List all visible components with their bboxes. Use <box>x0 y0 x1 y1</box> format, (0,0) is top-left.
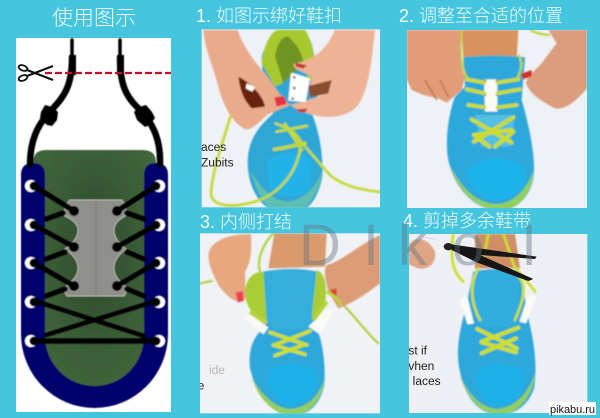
watermark text: k <box>398 213 428 278</box>
shoe insole <box>33 150 156 396</box>
panel: step 3 photo: e <box>198 378 205 392</box>
panel: lacing diagram <box>16 38 171 412</box>
right hand <box>526 30 587 109</box>
right hand <box>325 235 380 308</box>
photo caption fragment: st if <box>408 343 428 357</box>
title: 使用图示 <box>52 7 136 30</box>
hand <box>409 239 435 269</box>
heading: step 4: 4. 剪掉多余鞋带 <box>403 211 531 231</box>
laces <box>200 233 378 356</box>
watermark text <box>299 213 537 278</box>
photo caption fragment: ide <box>209 363 225 377</box>
lace ends and knots <box>30 55 160 346</box>
left hand <box>407 30 465 103</box>
watermark text: I <box>521 213 537 278</box>
panel: step 4 photo: laces <box>413 374 441 388</box>
panel: step 1 photo <box>201 29 380 210</box>
panel: step 4 photo: vhen <box>408 359 434 373</box>
panel: step 2 photo <box>407 30 587 211</box>
heading: step 1: 1. 如图示绑好鞋扣 <box>196 6 342 26</box>
shoe <box>250 269 325 416</box>
photo caption fragment: aces <box>201 140 226 154</box>
clip left and right <box>243 313 268 334</box>
left hand <box>208 234 251 301</box>
clip <box>484 79 497 112</box>
nails <box>274 96 287 107</box>
collar <box>262 30 314 87</box>
shoe <box>447 56 534 211</box>
panel: step 4 photo <box>408 234 587 415</box>
right hand <box>290 30 375 117</box>
watermark text: o <box>452 213 484 278</box>
gray lace clip <box>64 200 126 296</box>
ankle laces <box>460 30 550 80</box>
icon: scissors <box>18 64 53 82</box>
lime collar flaps <box>245 272 267 320</box>
leg <box>268 233 327 268</box>
laces <box>467 79 520 147</box>
leg <box>475 234 520 268</box>
laces <box>30 40 160 341</box>
watermark text: D <box>299 213 341 278</box>
source badge: pikabu.ru <box>550 404 595 416</box>
heading: step 3: 3. 内侧打结 <box>200 212 292 232</box>
icon: scissors in hand <box>423 237 537 281</box>
clips <box>460 297 474 324</box>
panel: step 3 photo <box>198 233 380 416</box>
laces <box>452 234 535 353</box>
left hand <box>203 30 290 129</box>
navy shoe outline <box>21 163 168 408</box>
laces <box>211 115 380 205</box>
eyelets <box>25 180 165 347</box>
heading: step 2: 2. 调整至合适的位置 <box>399 6 563 26</box>
shoe <box>458 269 536 415</box>
panel: step 1 photo: Zubits <box>201 155 234 169</box>
watermark text: I <box>363 213 379 278</box>
leg <box>462 30 518 58</box>
cut line <box>45 72 171 74</box>
shoe <box>248 34 323 210</box>
clip <box>288 73 310 102</box>
